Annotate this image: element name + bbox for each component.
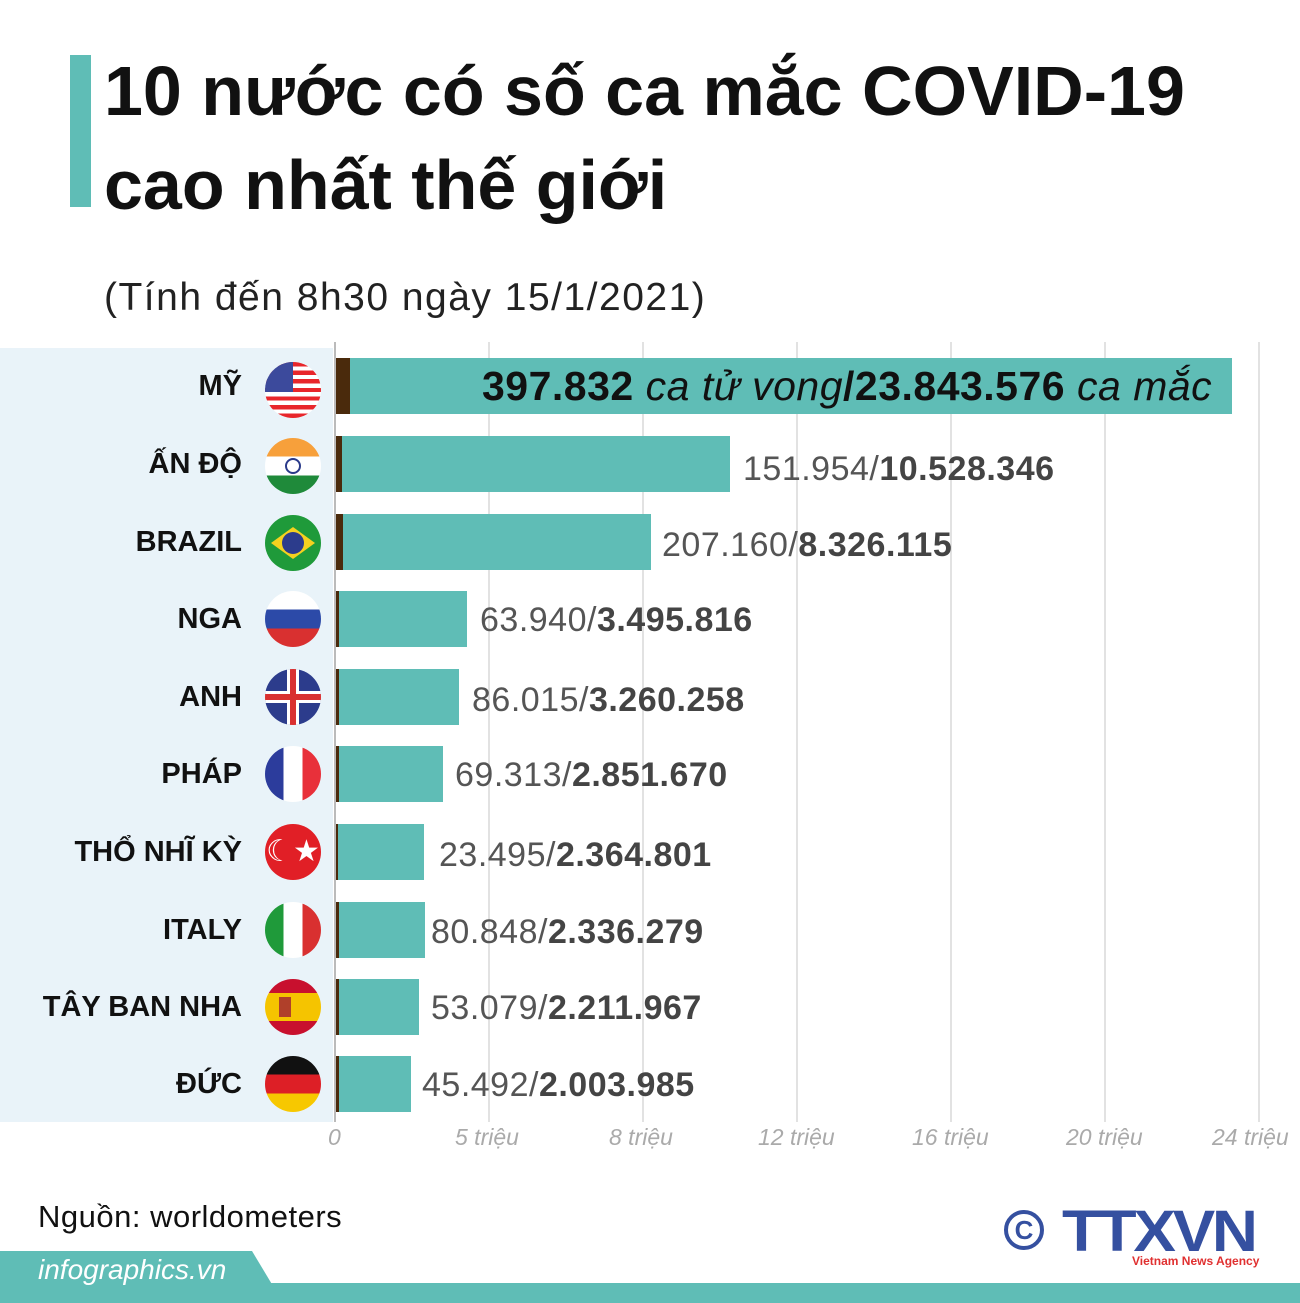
icon: France flag: [265, 746, 321, 802]
title: 10 nước có số ca mắc COVID-19: [104, 52, 1185, 130]
bar: Russia: [336, 591, 467, 647]
text: TÂY BAN NHA: [43, 991, 242, 1023]
bar: Italy: [336, 902, 425, 958]
title: cao nhất thế giới: [104, 146, 667, 224]
chart gridlines: [334, 342, 1260, 1122]
icon: Turkey flag: ☾★: [266, 835, 320, 868]
text: ANH: [179, 681, 242, 713]
text: 12 triệu: [758, 1124, 835, 1150]
axis ticks: [328, 1124, 1289, 1150]
bar: Turkey: [336, 824, 424, 880]
footer tab: infographics.vn: [0, 1251, 272, 1285]
text: PHÁP: [161, 758, 242, 790]
text: ẤN ĐỘ: [149, 448, 242, 480]
text: 86.015/3.260.258: [472, 681, 745, 719]
bar: France: [336, 746, 443, 802]
bar: Germany: [336, 1056, 411, 1112]
title: [104, 52, 1185, 224]
icon: India flag: [265, 438, 321, 494]
text: 24 triệu: [1212, 1124, 1289, 1150]
text: 5 triệu: [455, 1124, 519, 1150]
text: 80.848/2.336.279: [431, 913, 704, 951]
source: Nguồn: worldometers: [38, 1199, 342, 1234]
text: BRAZIL: [136, 526, 242, 558]
icon: Russia flag: [265, 591, 321, 647]
text: NGA: [178, 603, 242, 635]
icon: UK flag: [265, 669, 321, 725]
flags: [265, 362, 321, 1112]
subtitle: (Tính đến 8h30 ngày 15/1/2021): [104, 276, 706, 319]
text: 207.160/8.326.115: [662, 526, 952, 564]
logo: TTXVN: C: [1015, 1215, 1033, 1245]
bar: UK: [336, 669, 459, 725]
text: 69.313/2.851.670: [455, 756, 728, 794]
bars: [336, 358, 1232, 1112]
footer band: [0, 1283, 1300, 1303]
label panel background: [0, 348, 333, 1122]
title accent bar: [70, 55, 91, 207]
text: MỸ: [198, 370, 242, 402]
text: ĐỨC: [176, 1068, 242, 1100]
bar: Spain: [336, 979, 419, 1035]
bar: India: [336, 436, 730, 492]
text: 16 triệu: [912, 1124, 989, 1150]
text: 63.940/3.495.816: [480, 601, 753, 639]
text: 151.954/10.528.346: [743, 450, 1055, 488]
bar: US: [336, 358, 1232, 414]
icon: US flag: [265, 362, 321, 418]
icon: Germany flag: [265, 1056, 321, 1112]
icon: Turkey flag: [265, 824, 321, 880]
text: THỔ NHĨ KỲ: [74, 836, 242, 868]
logo: TTXVN: Vietnam News Agency: [1132, 1254, 1259, 1268]
text: 397.832 ca tử vong/23.843.576 ca mắc: [482, 363, 1212, 409]
country labels: [43, 370, 242, 1100]
text: 8 triệu: [609, 1124, 673, 1150]
logo: TTXVN: TTXVN: [1062, 1199, 1255, 1264]
text: 0: [328, 1124, 341, 1150]
icon: Brazil flag: [265, 515, 321, 571]
text: ITALY: [163, 914, 242, 946]
icon: Italy flag: [265, 902, 321, 958]
text: 20 triệu: [1066, 1124, 1143, 1150]
text: 53.079/2.211.967: [431, 989, 702, 1027]
footer tab: infographics.vn: infographics.vn: [38, 1254, 226, 1285]
bar: Brazil: [336, 514, 651, 570]
icon: Spain flag: [265, 979, 321, 1035]
text: 45.492/2.003.985: [422, 1066, 695, 1104]
text: 23.495/2.364.801: [439, 836, 712, 874]
